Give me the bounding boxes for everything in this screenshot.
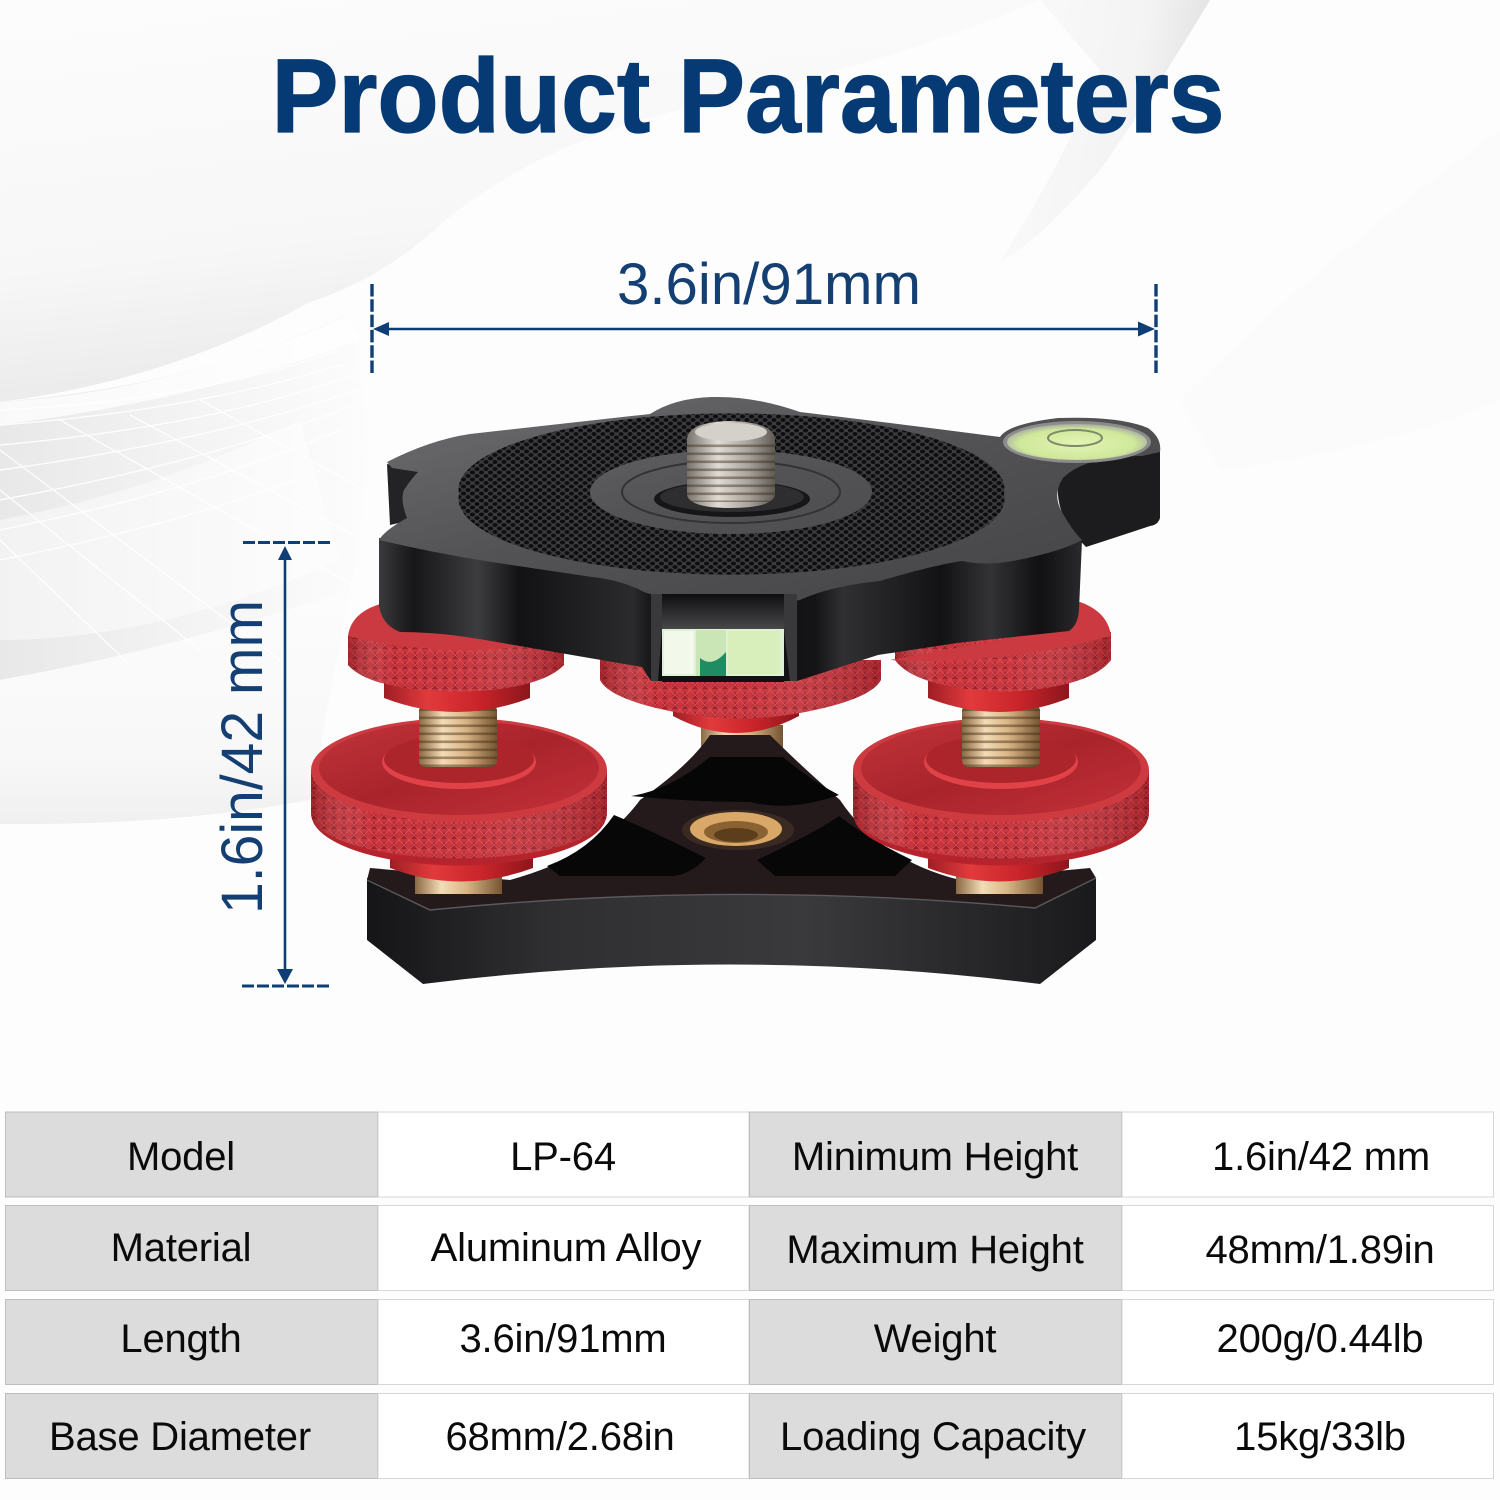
row: Material / Maximum Height [6,1206,1494,1290]
row: Length / Weight: Length [120,1317,242,1361]
front tube level [662,629,784,682]
knurled grip ring [458,413,1004,575]
row: Model / Minimum Height: LP-64 [510,1135,616,1179]
left lower stem [390,845,533,894]
row: Length / Weight: Weight [874,1317,996,1361]
front notch recess [662,594,784,630]
left large knob [311,718,607,865]
middle rear knob [600,660,881,761]
row: Material / Maximum Height: Material [111,1226,251,1270]
top plate side wall [379,538,1082,681]
row: Base Diameter / Loading Capacity [6,1394,1494,1478]
top plate left ear [387,464,420,525]
left brass screw [419,705,497,767]
threaded brass insert [682,810,794,850]
row: Base Diameter / Loading Capacity: Base Diameter [49,1415,311,1459]
row: Model / Minimum Height: 1.6in/42 mm [1212,1135,1430,1179]
row: Material / Maximum Height: Maximum Height [786,1228,1084,1272]
right large knob [853,718,1149,865]
row: Model / Minimum Height [6,1112,1494,1197]
title: Product Parameters [272,38,1224,155]
row: Material / Maximum Height: Aluminum Alloy [431,1226,702,1270]
row: Length / Weight: 3.6in/91mm [460,1317,666,1361]
dimension: width: 3.6in/91mm [617,252,921,317]
top plate bubble-level lobe side [1058,445,1160,547]
row: Base Diameter / Loading Capacity: 68mm/2.68in [445,1415,675,1459]
top plate surface [379,397,1160,602]
product: leveling base [311,397,1160,984]
center disc [622,461,840,523]
upper right knob [890,602,1111,712]
dimension: height [210,542,331,986]
dimension: height: 1.6in/42 mm [210,600,275,914]
circular bubble level [1003,421,1151,463]
row: Base Diameter / Loading Capacity: 15kg/33lb [1234,1415,1406,1459]
front notch frame [651,594,797,681]
bottom foot plate [367,735,1096,984]
row: Material / Maximum Height: 48mm/1.89in [1205,1228,1435,1272]
right lower stem [928,845,1069,894]
row: Model / Minimum Height: Model [127,1135,235,1179]
row: Length / Weight: 200g/0.44lb [1217,1317,1423,1361]
upper left knob [348,600,564,712]
dimension: width [372,252,1156,373]
row: Length / Weight [6,1300,1494,1384]
stainless mounting screw [687,421,775,508]
right brass screw [962,705,1040,767]
row: Base Diameter / Loading Capacity: Loading Capacity [780,1415,1086,1459]
background grid lines [0,350,420,665]
row: Model / Minimum Height: Minimum Height [792,1135,1078,1179]
spec table [6,1112,1494,1478]
